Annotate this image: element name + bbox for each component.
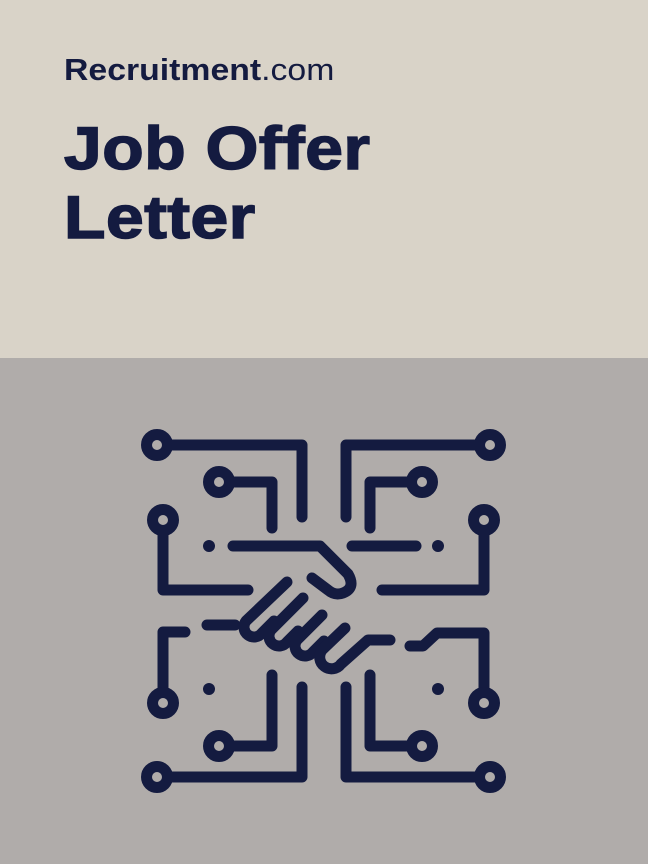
title: Letter [64, 184, 256, 251]
title [64, 115, 370, 251]
logo: Recruitment.com [64, 52, 334, 87]
title: Job Offer [64, 115, 370, 182]
panel: header background [0, 0, 648, 358]
panel: icon background [0, 358, 648, 864]
